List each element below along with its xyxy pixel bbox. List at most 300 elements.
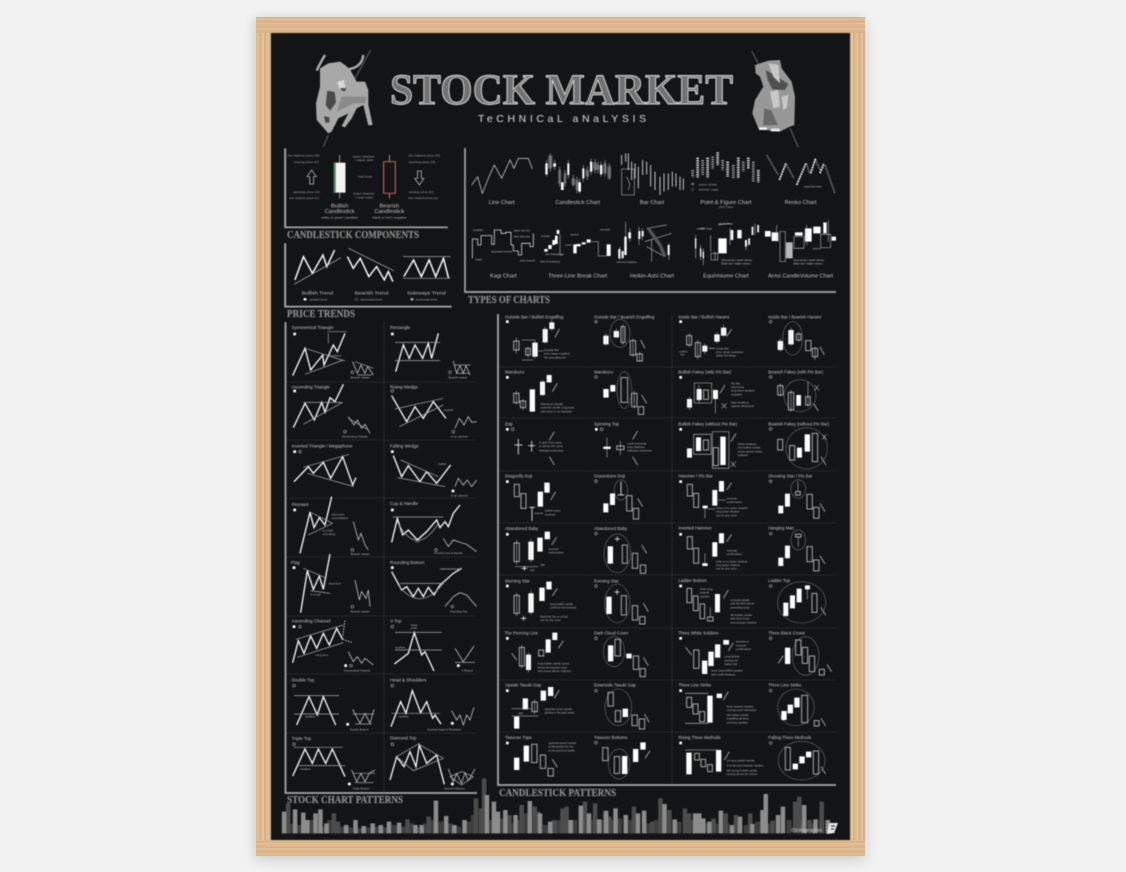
arms candlevolume chart: Skinned bar = lower volume (793, 259, 825, 262)
ladder bottom: and stronger shadow (730, 620, 758, 624)
diamond top: Diamond Top (390, 735, 417, 740)
heikin-ashi chart (617, 222, 674, 280)
three line strike bullish: moving lower and lower (727, 708, 756, 712)
three white soldiers: downtrend (736, 640, 749, 644)
bar chart: Bar Chart (640, 200, 665, 206)
outside bar bullish engulfing (505, 314, 570, 360)
rounding bottom: Rounding Bottom (390, 560, 425, 565)
gravestone doji (594, 474, 643, 519)
heading: price trends: PRICE TRENDS (287, 309, 355, 320)
falling wedge (390, 443, 477, 497)
abandoned baby bullish: Abandoned Baby (505, 526, 539, 531)
three line strike bearish (768, 683, 826, 726)
sideways trend: horizontal trend (416, 298, 438, 301)
three-line break chart: new high (600, 228, 611, 231)
bullish fakey with pin bar: against directional (731, 404, 754, 408)
equivolume chart: narrow range (718, 222, 734, 225)
bullish fakey with pin bar: false breakout (731, 400, 749, 404)
inside bar bullish harami: mother (679, 349, 688, 353)
marubozu bearish (594, 369, 647, 414)
three line strike bullish: engulfing all three (727, 717, 749, 721)
bullish fakey without pin bar: False breakout (738, 442, 757, 446)
hanging man (768, 525, 825, 571)
three white soldiers: higher low (724, 662, 738, 666)
rising wedge: in an uptrend (451, 435, 468, 439)
arms candlevolume chart (765, 220, 836, 280)
anatomy labels: / lower wick (355, 196, 373, 199)
candlestick rows six to nine (504, 578, 832, 780)
ladder bottom: with short body (730, 617, 750, 621)
anatomy labels: opening price (O) (293, 190, 320, 194)
kagi chart: blue: thick line (514, 236, 530, 239)
piercing line: long bullish candle opens (538, 662, 570, 666)
inverted hammer (678, 525, 748, 571)
hammer pin bar: long lower shadow (716, 510, 740, 514)
symmetrical triangle (292, 325, 373, 379)
tweezer bottoms (594, 735, 650, 779)
bar chart (622, 153, 683, 206)
pennant: in a half (323, 529, 333, 533)
rising three methods: 5th strong bullish candle (727, 768, 758, 772)
panel: stock chart patterns (286, 322, 477, 793)
tweezer bottoms: Tweezer Bottoms (594, 735, 627, 740)
bullish fakey with pin bar: long lower shadow (731, 389, 755, 393)
hammer pin bar: confirmation (727, 500, 742, 504)
pennant: Pennant (292, 502, 309, 507)
inside bar bearish harami: Inside Bar / Bearish Harami (768, 314, 821, 319)
arms candlevolume chart: volume (813, 247, 821, 250)
cup and handle: cup (415, 539, 420, 543)
bearish trend: Bearish Trend (355, 291, 389, 296)
three white soldiers: Long Bullish (724, 655, 740, 659)
three white soldiers (678, 630, 751, 676)
morning star: Spinning Top or a Doji (540, 614, 568, 618)
panel: candlestick components (285, 148, 448, 227)
heading: candlestick components: CANDLESTICK COMPONENTS (287, 230, 419, 241)
pennant (292, 497, 370, 556)
bullish fakey with pin bar: Bullish Fakey (with Pin Bar) (678, 369, 732, 374)
dark cloud cover (594, 630, 648, 677)
anatomy labels: closing price (C) (294, 160, 319, 164)
rounding bottom (390, 560, 477, 614)
hammer pin bar: Little or no upper shadow, (716, 506, 749, 510)
tweezer tops: at the uptrend candle (548, 748, 575, 752)
three-line break chart: lines of resistance (540, 260, 561, 263)
dragonfly doji: reversal (545, 512, 555, 516)
renko chart (767, 155, 835, 206)
v-top: V-Top (390, 619, 402, 624)
kagi chart (472, 229, 535, 280)
doji: indicates indecision (539, 449, 564, 453)
kagi chart: "waist" (475, 258, 483, 261)
three line strike bullish (678, 683, 756, 724)
signature logo: ©Infographix (791, 827, 823, 834)
heading: stock chart patterns: STOCK CHART PATTERNS (287, 795, 403, 806)
bullish trend (294, 250, 341, 301)
three white soldiers: reversal (736, 643, 746, 647)
tweezer tops (505, 735, 577, 776)
hammer pin bar: can be any color (716, 513, 737, 517)
rising three methods: 3 small short bearish candles (727, 763, 764, 767)
falling three methods: Falling Three Methods (768, 735, 811, 740)
three white soldiers: Three White Soldiers (678, 630, 719, 635)
equivolume chart: EquiVolume Chart (703, 274, 749, 280)
candle captions: black or red | negative (372, 216, 407, 219)
morning star: confirms the reversal (550, 606, 577, 610)
symmetrical triangle: breakout (330, 354, 341, 358)
ladder top: Ladder Top (768, 578, 790, 583)
spinning top (594, 422, 652, 465)
outside bar bearish engulfing: Outside Bar / Bearish Engulfing (594, 314, 655, 319)
downside tasuki gap: Downside Tasuki Gap (594, 683, 636, 688)
ladder bottom: Ladder Bottom (678, 578, 707, 583)
ascending channel: long-term (316, 653, 329, 657)
ladder top (768, 578, 826, 623)
ascending channel (292, 619, 373, 673)
v-top: neckline (395, 646, 406, 650)
diamond top: Diamond Bottom (444, 786, 466, 790)
inverted hammer: reversal (727, 548, 737, 552)
marubozu bullish: Marubozu Candle (541, 402, 563, 406)
rounding bottom: Rounding Top (450, 610, 468, 614)
ascending channel: Descending Channel (344, 669, 371, 673)
outside bar bullish engulfing: Outside Bar (544, 348, 559, 352)
tweezer tops: opposite-toned candle (548, 741, 577, 745)
bullish trend: upward trend (309, 298, 328, 301)
triple top (292, 736, 375, 790)
outside bar bullish engulfing: Outside Bar / Bullish Engulfing (505, 314, 564, 319)
shooting star pin bar: Shooting Star / Pin Bar (768, 474, 813, 479)
renko chart: Renko Chart (785, 200, 817, 206)
anatomy labels: lower shadow (353, 192, 375, 195)
three line strike bearish: Three Line Strike (768, 683, 802, 688)
dragonfly doji: Dragonfly Doji (505, 474, 532, 479)
icon: bull (316, 50, 373, 147)
anatomy labels: real body (358, 175, 373, 179)
bearish fakey with pin bar: Bearish Fakey (with Pin Bar) (768, 369, 824, 374)
spinning top: small real body (627, 441, 647, 445)
line chart: Line Chart (489, 200, 515, 206)
line chart (472, 158, 532, 206)
ascending triangle: Descending Triangle (342, 435, 368, 439)
doji: C and O the same (539, 440, 562, 444)
ladder bottom: 4th bullish candle (730, 613, 753, 617)
abandoned baby bullish: gap (540, 563, 545, 567)
anatomy labels: opening price (O) (408, 160, 435, 164)
patterns upper half (292, 325, 477, 556)
patterns lower half (291, 554, 477, 790)
rising three methods: closing above the others (727, 772, 758, 776)
inside bar bullish harami: Inside Bar / Bullish Harami (678, 314, 729, 319)
three-line break chart: new closing price (545, 253, 565, 256)
evening star: Evening Star (594, 578, 619, 583)
icon: bear (752, 51, 798, 147)
flag: Flag (291, 560, 300, 565)
pennant: consolidation (332, 516, 349, 520)
piercing line (504, 630, 571, 673)
bearish candle (384, 155, 395, 198)
piercing line: The Piercing Line (504, 630, 539, 635)
equivolume chart (695, 222, 759, 280)
ladder bottom: with 50-60% above (730, 602, 755, 606)
double top (292, 678, 374, 731)
inverted hammer: can be any color (716, 567, 737, 571)
flag: Bearish variant (351, 610, 370, 614)
heading: types of charts: TYPES OF CHARTS (468, 295, 550, 306)
abandoned baby bullish: reversal (548, 547, 559, 551)
diamond top (390, 735, 475, 790)
renko chart: equal time does (804, 185, 822, 188)
gravestone doji: Gravestone Doji (594, 474, 625, 479)
three-line break chart: reversal (541, 235, 550, 238)
marubozu bullish: Marubozu (505, 369, 525, 374)
marubozu bullish: with short or no shadows (541, 409, 573, 413)
inverted triangle megaphone: Inverted Triangle / Megaphone (292, 443, 353, 448)
head and shoulders (390, 678, 474, 731)
rising wedge: bearish (444, 408, 454, 412)
symmetrical triangle: Bearish variant (351, 375, 370, 379)
doji: or almost the same (539, 444, 563, 448)
pennant: Bearish variant (351, 552, 370, 556)
outside bar bullish engulfing: price range engulfed (544, 352, 570, 356)
morning star: can be any color (540, 618, 561, 622)
flag (291, 554, 370, 614)
heikin-ashi chart: low level shadows (617, 261, 637, 264)
rising wedge (390, 384, 477, 439)
rectangle (390, 325, 471, 379)
dark cloud cover: Dark Cloud Cover (594, 630, 629, 635)
upside tasuki gap: opposite-toned candle (544, 707, 573, 711)
upside tasuki gap: Upside Tasuki Gap (505, 683, 542, 688)
inverted hammer: Little or no lower shadow, (716, 559, 748, 563)
three line strike bullish: previous candles (727, 720, 748, 724)
sideways trend (403, 257, 450, 301)
flag: short-term (328, 581, 342, 585)
piercing line: below the bearish close (538, 665, 568, 669)
ascending triangle (292, 384, 370, 439)
title: STOCK MARKET (390, 67, 733, 114)
point and figure chart: (P&F Chart) (719, 205, 733, 209)
morning star (505, 578, 577, 622)
triple top: Triple Bottom (353, 786, 370, 790)
falling three methods (768, 735, 826, 780)
bullish fakey with pin bar: short body (731, 385, 745, 389)
double top: Double Bottom (350, 727, 369, 731)
equivolume chart: Wider bar = higher volume (721, 262, 751, 265)
bullish fakey with pin bar: engulfed (731, 392, 742, 396)
piercing line: and closes above midpoint (538, 669, 571, 673)
kagi chart: black: thin line (514, 230, 530, 233)
shooting star pin bar (768, 474, 825, 518)
hammer pin bar (678, 474, 749, 518)
bearish fakey with pin bar (768, 369, 824, 412)
morning star: long bullish candle (550, 602, 574, 606)
bullish trend: Bullish Trend (302, 291, 333, 296)
abandoned baby bearish: Abandoned Baby (594, 526, 628, 531)
falling wedge: Falling Wedge (390, 443, 419, 448)
point and figure chart: upside / demand (699, 184, 718, 187)
cup and handle (390, 501, 477, 555)
bullish candle (334, 155, 345, 198)
falling wedge: bullish (438, 462, 447, 466)
ladder bottom: candles (700, 594, 710, 598)
inside bar bullish harami: Inside Bar (716, 346, 729, 350)
inside bar bullish harami (678, 314, 744, 359)
tweezer tops: at identically the top (548, 745, 574, 749)
inverted hammer: Inverted Hammer (678, 525, 712, 530)
equivolume chart: Skinned bar = lower volume (721, 259, 753, 262)
upside tasuki gap: gap (518, 711, 523, 715)
skyline bar chart (284, 778, 833, 833)
sideways trend: Sideways Trend (407, 291, 446, 296)
ladder bottom: reversal candle (730, 598, 750, 602)
v-top: peak (411, 626, 417, 630)
ladder bottom: three long (700, 587, 713, 591)
spinning top: Spinning Top (594, 422, 620, 427)
bullish fakey without pin bar (678, 422, 763, 468)
candle captions: Candlestick (325, 209, 355, 215)
outside bar bullish engulfing: the preceding bar (544, 355, 566, 359)
pennant: of a sharp (323, 532, 336, 536)
bearish trend (347, 248, 394, 301)
candle captions (321, 204, 407, 219)
ascending triangle: Ascending Triangle (292, 384, 330, 389)
arms candlevolume chart: Wider bar = higher volume (793, 262, 823, 265)
rising three methods (678, 735, 764, 776)
three-line break chart (540, 228, 611, 280)
three white soldiers: three long bullish candles (711, 669, 743, 673)
kagi chart: downward reversal (491, 250, 512, 253)
subtitle: TeCHNICaL aNaLYSIS (478, 113, 646, 125)
rising three methods: 1st long bullish candle (727, 758, 755, 762)
ladder bottom: preceding body (730, 605, 750, 609)
three line strike bullish: Three Line Strike (678, 683, 712, 688)
candlestick rows one to five (505, 314, 830, 573)
outside bar bearish engulfing (594, 314, 655, 362)
anatomy labels: upper shadow (352, 155, 375, 158)
morning star: Morning Star (505, 578, 530, 583)
three white soldiers: with small shadows (711, 672, 736, 676)
three white soldiers: closing low (724, 658, 739, 662)
bullish fakey without pin bar: Bullish Fakey (without Pin Bar) (678, 422, 738, 427)
falling wedge: in an uptrend (451, 493, 468, 497)
rectangle: Bearish variant (448, 375, 467, 379)
arms candlevolume chart: Arms CandleVolume Chart (768, 274, 834, 280)
marubozu bearish: Marubozu (594, 369, 614, 374)
cup and handle: Inverted Cup & Handle (434, 551, 463, 555)
spinning top: long shadows (627, 445, 645, 449)
bearish trend: downward trend (360, 298, 383, 301)
rising three methods: Rising Three Methods (678, 735, 721, 740)
three line strike bullish: three bearish candles (727, 704, 754, 708)
candle captions: Bullish (331, 204, 348, 209)
triple top: neckline (300, 767, 311, 771)
panel: price trends (285, 243, 452, 307)
kagi chart: "shoulder" (472, 229, 484, 232)
abandoned baby bullish: doji (530, 568, 535, 572)
point and figure chart (691, 152, 758, 209)
anatomy labels: the highest price (H) (408, 154, 440, 157)
direction arrows (307, 170, 424, 185)
marubozu bullish (505, 369, 575, 413)
double top: Double Top (292, 678, 315, 683)
ladder bottom (678, 578, 758, 624)
bullish fakey with pin bar (678, 369, 755, 413)
rising wedge: Rising Wedge (390, 384, 418, 389)
three black crows: Three Black Crows (768, 630, 805, 635)
inverted triangle megaphone (292, 443, 356, 487)
signature logo (791, 823, 838, 834)
abandoned baby bullish (505, 526, 564, 572)
head and shoulders: Head & Shoulders (390, 678, 427, 683)
inverted hammer: long upper shadow (716, 563, 741, 567)
anatomy labels: closing price (C) (408, 190, 434, 194)
bullish fakey with pin bar: Pin Bar (731, 381, 740, 385)
poster background (271, 33, 850, 840)
bullish fakey without pin bar: pullback (738, 453, 749, 457)
three-line break chart: Three-Line Break Chart (548, 274, 608, 280)
three line strike bullish: 4th bullish candle (727, 713, 749, 717)
cup and handle: Cup & Handle (390, 501, 418, 506)
panel: candlestick patterns (498, 314, 836, 785)
upside tasuki gap (505, 683, 575, 729)
panel: types of charts (465, 148, 836, 292)
inside bar bullish harami: bar (680, 353, 684, 357)
inside bar bullish harami: price range contained (716, 350, 744, 354)
doji (505, 422, 564, 465)
point and figure chart: ✕ (691, 182, 694, 187)
inside bar bullish harami: within the range (716, 354, 736, 358)
marubozu bullish: powerful candle, long body (541, 406, 575, 410)
abandoned baby bullish: confirmation (548, 551, 564, 555)
hammer pin bar: reversal (727, 496, 737, 500)
point and figure chart: downside / supply (699, 188, 719, 191)
rectangle: Rectangle (390, 325, 411, 330)
ladder bottom: bearish (700, 591, 710, 595)
upside tasuki gap: closing in the gap range (544, 711, 575, 715)
hanging man: Hanging Man (768, 525, 795, 530)
anatomy labels: the highest price (H) (288, 154, 319, 157)
ascending channel: Ascending Channel (292, 619, 331, 624)
spinning top: indicates indecision (627, 449, 652, 453)
v-top: V Bottom (462, 669, 474, 673)
head and shoulders: Inverted Head & Shoulders (427, 727, 462, 731)
bullish fakey without pin bar: 2nd bullish candle (738, 446, 761, 450)
tweezer tops: Tweezer Tops (505, 735, 532, 740)
three-line break chart: second (570, 234, 579, 237)
kagi chart: Kagi Chart (490, 274, 517, 280)
candlestick chart (545, 153, 611, 206)
evening star (594, 578, 648, 624)
equivolume chart: wide range (700, 228, 713, 231)
pennant: short-term (332, 513, 345, 517)
candlestick chart: Candlestick Chart (555, 200, 600, 206)
anatomy labels: / upper wick (355, 158, 374, 162)
downside tasuki gap (594, 683, 649, 729)
candle captions: Candlestick (374, 209, 405, 215)
anatomy labels (288, 154, 440, 200)
head and shoulders: neckline (398, 715, 409, 719)
triple top: Triple Top (292, 736, 312, 741)
heikin-ashi chart: Heikin-Ashi Chart (630, 274, 674, 280)
flag: in a half (311, 593, 321, 597)
bullish fakey without pin bar: closes above inside (738, 449, 763, 453)
wooden frame (256, 17, 865, 856)
symmetrical triangle: Symmetrical Triangle (292, 325, 334, 330)
bearish fakey without pin bar (768, 422, 830, 469)
abandoned baby bearish (594, 526, 647, 573)
inside bar bearish harami (768, 314, 824, 360)
